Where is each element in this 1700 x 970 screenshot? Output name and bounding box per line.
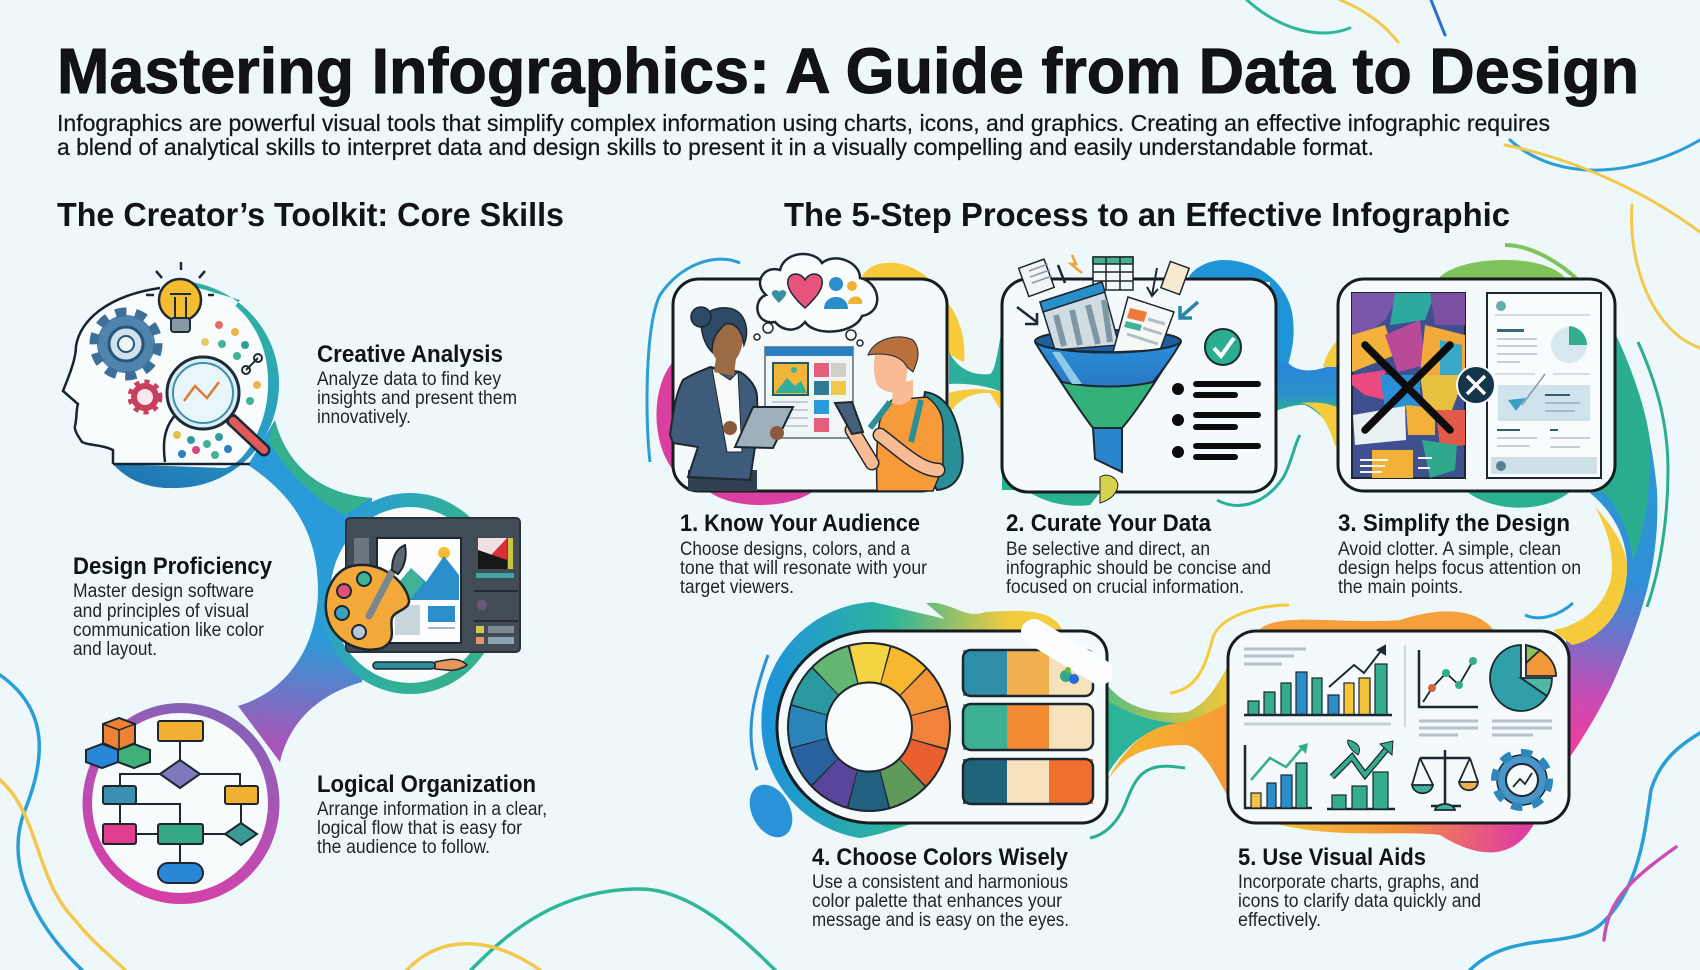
thought cloud <box>754 254 877 346</box>
cubes <box>86 718 150 768</box>
text: design proficiency: and layout. <box>73 639 157 660</box>
card frame <box>1002 279 1276 492</box>
face <box>708 316 744 365</box>
man <box>835 337 963 491</box>
panel: step 1 card <box>670 254 963 491</box>
jacket <box>670 367 758 480</box>
text: design proficiency <box>73 553 273 660</box>
hair <box>868 337 918 372</box>
right ribbon yellow <box>1553 507 1627 645</box>
flow connectors <box>120 741 241 863</box>
step 3 blobs <box>1323 245 1580 508</box>
data dots <box>173 321 262 459</box>
gear with chart <box>1495 753 1549 807</box>
connector steps 2 to 3 <box>1272 362 1338 440</box>
text: design proficiency: Master design software <box>73 581 254 602</box>
text: logical organization: logical flow that is easy for <box>317 818 523 839</box>
color picker and side tools <box>354 538 518 644</box>
text: step 1 <box>680 510 928 598</box>
text: step 5: 5. Use Visual Aids <box>1238 844 1426 871</box>
ribbon: design ring <box>318 493 502 694</box>
artist palette <box>326 565 409 650</box>
icon: flow chart <box>86 718 258 883</box>
panel: step 5 card <box>1228 631 1569 823</box>
panel: step 3 card <box>1338 279 1615 491</box>
intro paragraph <box>57 110 1550 160</box>
text: logical organization <box>317 771 547 858</box>
text: creative analysis <box>317 341 517 428</box>
face <box>874 354 908 392</box>
flow boxes <box>103 721 258 883</box>
card frame <box>1228 631 1569 823</box>
small growth chart <box>1245 743 1312 808</box>
text: step 2: focused on crucial information. <box>1006 577 1244 598</box>
arms <box>852 430 938 470</box>
connector steps 2 to 3: yellow <box>1300 403 1340 446</box>
text: step 5: Incorporate charts, graphs, and <box>1238 872 1479 893</box>
big X mark <box>1365 345 1450 430</box>
connector steps 4 to 5: teal <box>1105 698 1180 778</box>
ribbon: S connector <box>238 420 372 762</box>
text: step 5: icons to clarify data quickly and <box>1238 891 1481 912</box>
text: logical organization: the audience to follow. <box>317 837 490 858</box>
text: step 5: effectively. <box>1238 910 1321 931</box>
text: step 5 <box>1238 844 1481 931</box>
text: step 2: infographic should be concise and <box>1006 558 1271 579</box>
small color dot <box>1060 667 1079 684</box>
brush tip <box>392 545 406 574</box>
step 1 blobs and swoosh <box>647 259 964 505</box>
hair bun <box>691 307 711 327</box>
connector steps 1 to 2: teal <box>949 328 1002 392</box>
text: design proficiency: communication like color <box>73 620 265 641</box>
text: step 4 <box>812 844 1069 931</box>
divider <box>1404 645 1406 727</box>
panel: step 2 card <box>1002 255 1276 503</box>
hands <box>723 421 784 440</box>
text: creative analysis: innovatively. <box>317 407 411 428</box>
text: step 3: design helps focus attention on <box>1338 558 1581 579</box>
canvas <box>377 538 461 643</box>
text: design proficiency: and principles of visual <box>73 601 249 622</box>
text: logical organization: Logical Organization <box>317 771 536 798</box>
neck <box>714 358 736 376</box>
pie chart <box>1490 645 1556 735</box>
text: creative analysis: Analyze data to find key <box>317 369 501 390</box>
color wheel <box>769 623 969 831</box>
growth bars with leaf <box>1327 740 1395 809</box>
intro paragraph: a blend of analytical skills to interpret data and design skills to present it in a visually compelling and easily understandable format. <box>57 134 1374 160</box>
step 4 blobs <box>741 602 1289 845</box>
magnifier with line chart <box>167 357 264 450</box>
line chart <box>1419 650 1478 735</box>
funnel body <box>1035 342 1181 472</box>
tablet <box>735 407 793 448</box>
head silhouette <box>63 287 268 468</box>
text: creative analysis: Creative Analysis <box>317 341 503 368</box>
app window <box>346 518 520 652</box>
step 2 blobs and swoosh <box>1002 260 1300 506</box>
icon: head with analysis <box>63 262 268 468</box>
text: step 3: 3. Simplify the Design <box>1338 510 1570 537</box>
text: step 1: 1. Know Your Audience <box>680 510 920 537</box>
white brush blotch <box>1034 632 1100 672</box>
screen with swatches <box>765 347 853 438</box>
card frame <box>777 631 1107 823</box>
text: step 4: 4. Choose Colors Wisely <box>812 844 1069 871</box>
light bulb <box>146 262 214 332</box>
ribbon: head ring <box>113 280 279 488</box>
intro paragraph: Infographics are powerful visual tools that simplify complex information using charts, icons, and graphics. Creating an effective infographic requires <box>57 110 1550 136</box>
trousers <box>688 470 757 491</box>
text: step 3: the main points. <box>1338 577 1463 598</box>
text: step 4: message and is easy on the eyes. <box>812 910 1069 931</box>
neck <box>892 380 913 405</box>
flying documents <box>1017 255 1198 324</box>
connector steps 4 to 5: green yellow <box>1106 662 1230 723</box>
step 5 blobs <box>1257 611 1535 852</box>
text: step 4: Use a consistent and harmonious <box>812 872 1068 893</box>
title: Mastering Infographics: A Guide from Data to Design <box>57 35 1639 107</box>
heading: five step process: The 5-Step Process to an Effective Infographic <box>784 196 1510 233</box>
head outline <box>63 288 250 464</box>
text: step 2: 2. Curate Your Data <box>1006 510 1212 537</box>
shirt <box>712 368 742 452</box>
big gear <box>94 312 158 376</box>
palette swatch rows <box>963 650 1093 804</box>
ribbon: logic ring <box>82 703 280 904</box>
text: logical organization: Arrange information in a clear, <box>317 799 547 820</box>
backpack <box>915 392 963 490</box>
funnel rim back <box>1035 330 1181 352</box>
right ribbon green centre <box>1597 333 1650 560</box>
text: step 4: color palette that enhances your <box>812 891 1063 912</box>
top bar chart with arrow <box>1244 646 1392 724</box>
text: creative analysis: insights and present them <box>317 388 517 409</box>
text: step 2: Be selective and direct, an <box>1006 539 1210 560</box>
X badge <box>1457 366 1495 404</box>
lower brush <box>373 659 467 670</box>
ribbon: green edge <box>268 420 372 515</box>
text: step 1: target viewers. <box>680 577 794 598</box>
clean document <box>1487 293 1601 478</box>
text: design proficiency: Design Proficiency <box>73 553 273 580</box>
panel backgrounds: flowing blobs behind steps <box>647 245 1668 852</box>
panel: creator's toolkit ribbon <box>63 262 520 904</box>
right ribbon teal line and swoosh <box>1525 342 1668 618</box>
text: step 2 <box>1006 510 1271 598</box>
woman <box>670 307 793 491</box>
icon: design software and palette <box>326 518 520 670</box>
output slip <box>1100 475 1118 503</box>
text: step 1: Choose designs, colors, and a <box>680 539 910 560</box>
text: step 1: tone that will resonate with your <box>680 558 928 579</box>
hair <box>701 308 747 352</box>
data sheets entering funnel <box>1040 282 1174 352</box>
bullet list <box>1172 381 1261 460</box>
heading: core skills: The Creator’s Toolkit: Core Skills <box>57 196 564 233</box>
connector steps 4 to 5: orange <box>1106 700 1230 800</box>
check mark badge <box>1205 329 1241 365</box>
ribbon inner whites <box>92 507 490 893</box>
straps <box>870 400 921 442</box>
card frame <box>673 279 947 491</box>
phone <box>835 402 863 434</box>
card frame <box>1338 279 1615 491</box>
balance scale <box>1412 750 1478 810</box>
t-shirt <box>877 397 943 491</box>
small gear <box>130 382 160 412</box>
right ribbon base <box>1566 333 1657 757</box>
arms outline <box>852 430 938 470</box>
text: step 3 <box>1338 510 1581 598</box>
paint brush <box>369 572 392 616</box>
connector steps 1 to 2: yellow <box>949 389 1002 415</box>
panel: step 4 card <box>769 623 1107 831</box>
cluttered poster <box>1352 293 1465 478</box>
text: step 3: Avoid clotter. A simple, clean <box>1338 539 1561 560</box>
